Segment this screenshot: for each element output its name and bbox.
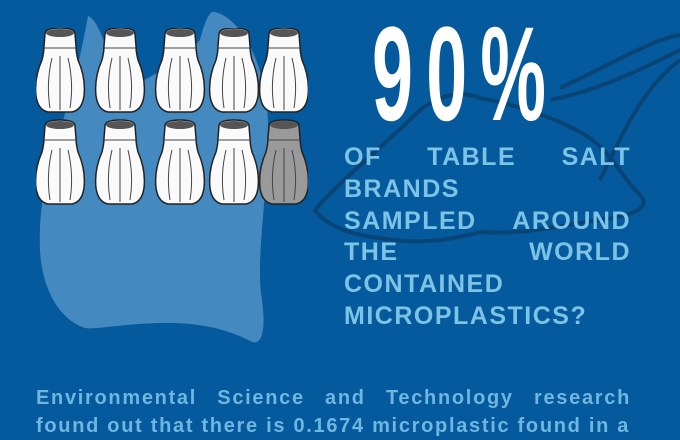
salt pile outline [315,35,680,241]
question text: OF TABLE SALT [344,143,631,171]
bottom text block: Environmental Science and Technology research found out that there is 0.1674 microplastic found in a [36,387,631,437]
pictogram: 10 salt shakers, 9 white 1 gray [36,28,308,205]
question text: BRANDS [344,175,460,203]
question text: CONTAINED [344,270,504,298]
headline: 90%: 90% [372,0,559,149]
question text: SAMPLED AROUND [344,207,631,235]
question text: THE WORLD [344,238,631,266]
question text: MICROPLASTICS? [344,302,587,330]
question text [344,143,631,330]
